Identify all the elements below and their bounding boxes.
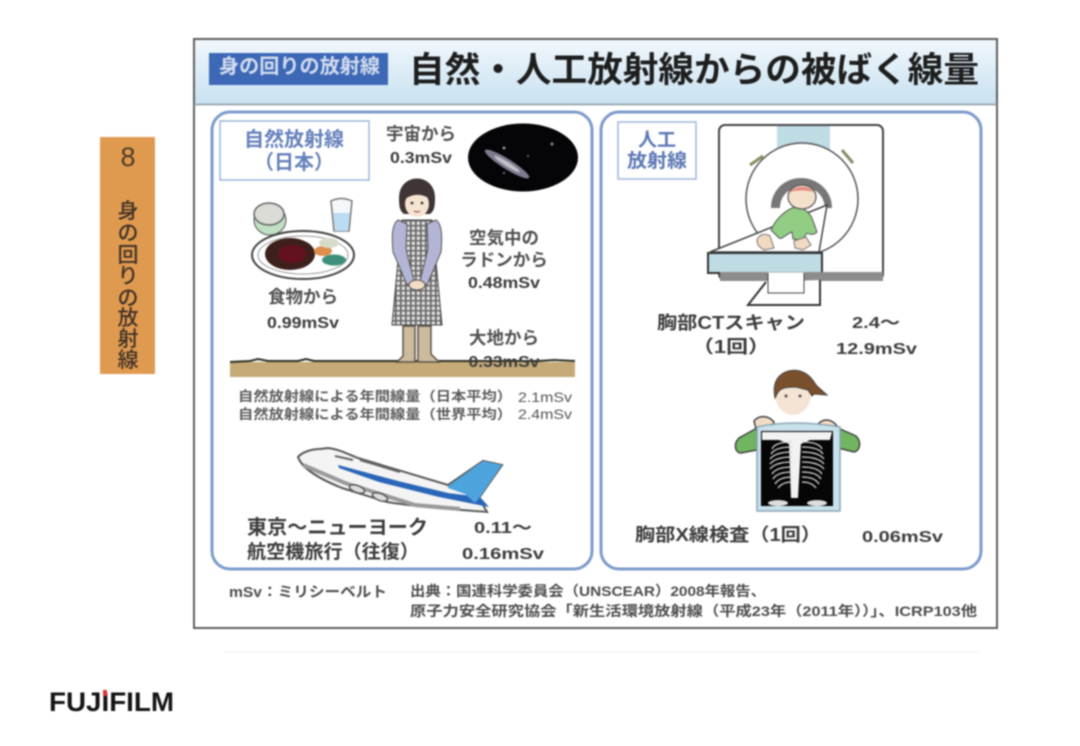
icon: person holding chest X-ray [735, 370, 860, 511]
food label: 0.99mSv [267, 315, 339, 332]
flight dose: 0.16mSv [462, 546, 544, 563]
CT dose [836, 315, 917, 358]
food label [267, 287, 339, 332]
radon label: 0.48mSv [468, 275, 540, 292]
header tag: 身の回りの放射線 [219, 55, 380, 78]
footnote: unit: mSv：ミリシーベルト [229, 585, 387, 601]
annual dose notes [238, 388, 572, 422]
icon: airplane [298, 448, 502, 512]
header band [194, 40, 997, 104]
flight label: 航空機旅行（往復） [247, 541, 419, 563]
cosmic label [386, 124, 456, 167]
radon label: ラドンから [460, 250, 548, 270]
CT label [657, 313, 805, 357]
radon label [460, 228, 548, 292]
CT dose: 12.9mSv [836, 341, 917, 358]
natural radiation label [220, 121, 369, 180]
ground [230, 359, 575, 377]
X-ray label: 胸部X線検査（1回） [635, 525, 821, 545]
flight dose [462, 520, 544, 563]
icon: CT scanner with patient [708, 125, 883, 305]
panel: natural radiation [212, 112, 592, 569]
footnote: sources [410, 583, 977, 619]
side tab: section 8: 8 [120, 142, 136, 172]
ground radiation label: 0.33mSv [468, 354, 540, 371]
natural radiation label: （日本） [254, 151, 334, 174]
side tab: section 8: 身の回りの放射線 [118, 200, 138, 372]
ground radiation label: 大地から [469, 328, 539, 348]
title: 自然・人工放射線からの被ばく線量 [409, 51, 979, 90]
flight dose: 0.11〜 [474, 520, 532, 537]
footnote: sources: 原子力安全研究協会「新生活環境放射線（平成23年（2011年））」、ICRP103他 [410, 603, 977, 619]
CT label: （1回） [692, 337, 770, 357]
CT dose: 2.4〜 [852, 315, 900, 332]
flight label: 東京〜ニューヨーク [247, 516, 428, 539]
artificial radiation label: 放射線 [627, 150, 687, 172]
artificial radiation label [618, 122, 696, 179]
artificial radiation label: 人工 [638, 130, 676, 151]
ground radiation label [468, 328, 540, 371]
header tag [209, 53, 388, 85]
food label: 食物から [268, 287, 338, 307]
cosmic label: 宇宙から [386, 124, 456, 144]
panel: artificial radiation [601, 112, 981, 569]
annual dose notes: 2.4mSv [518, 406, 572, 422]
annual dose notes: 自然放射線による年間線量（世界平均） [238, 406, 512, 422]
flight label [247, 516, 428, 563]
icon: galaxy [468, 124, 578, 192]
annual dose notes: 自然放射線による年間線量（日本平均） [238, 388, 512, 404]
icon: woman standing [392, 178, 442, 362]
X-ray dose: 0.06mSv [862, 529, 943, 546]
footnote: sources: 出典：国連科学委員会（UNSCEAR）2008年報告、 [410, 583, 766, 599]
logo: FUJIFILM: FUJIFILM [49, 687, 174, 717]
cosmic label: 0.3mSv [390, 150, 452, 167]
natural radiation label: 自然放射線 [244, 127, 344, 151]
side tab: section 8 [100, 137, 155, 374]
CT label: 胸部CTスキャン [657, 313, 805, 333]
icon: rice, water and plate of food [252, 198, 354, 279]
main figure frame [194, 39, 997, 628]
radon label: 空気中の [469, 228, 539, 248]
annual dose notes: 2.1mSv [518, 389, 572, 405]
